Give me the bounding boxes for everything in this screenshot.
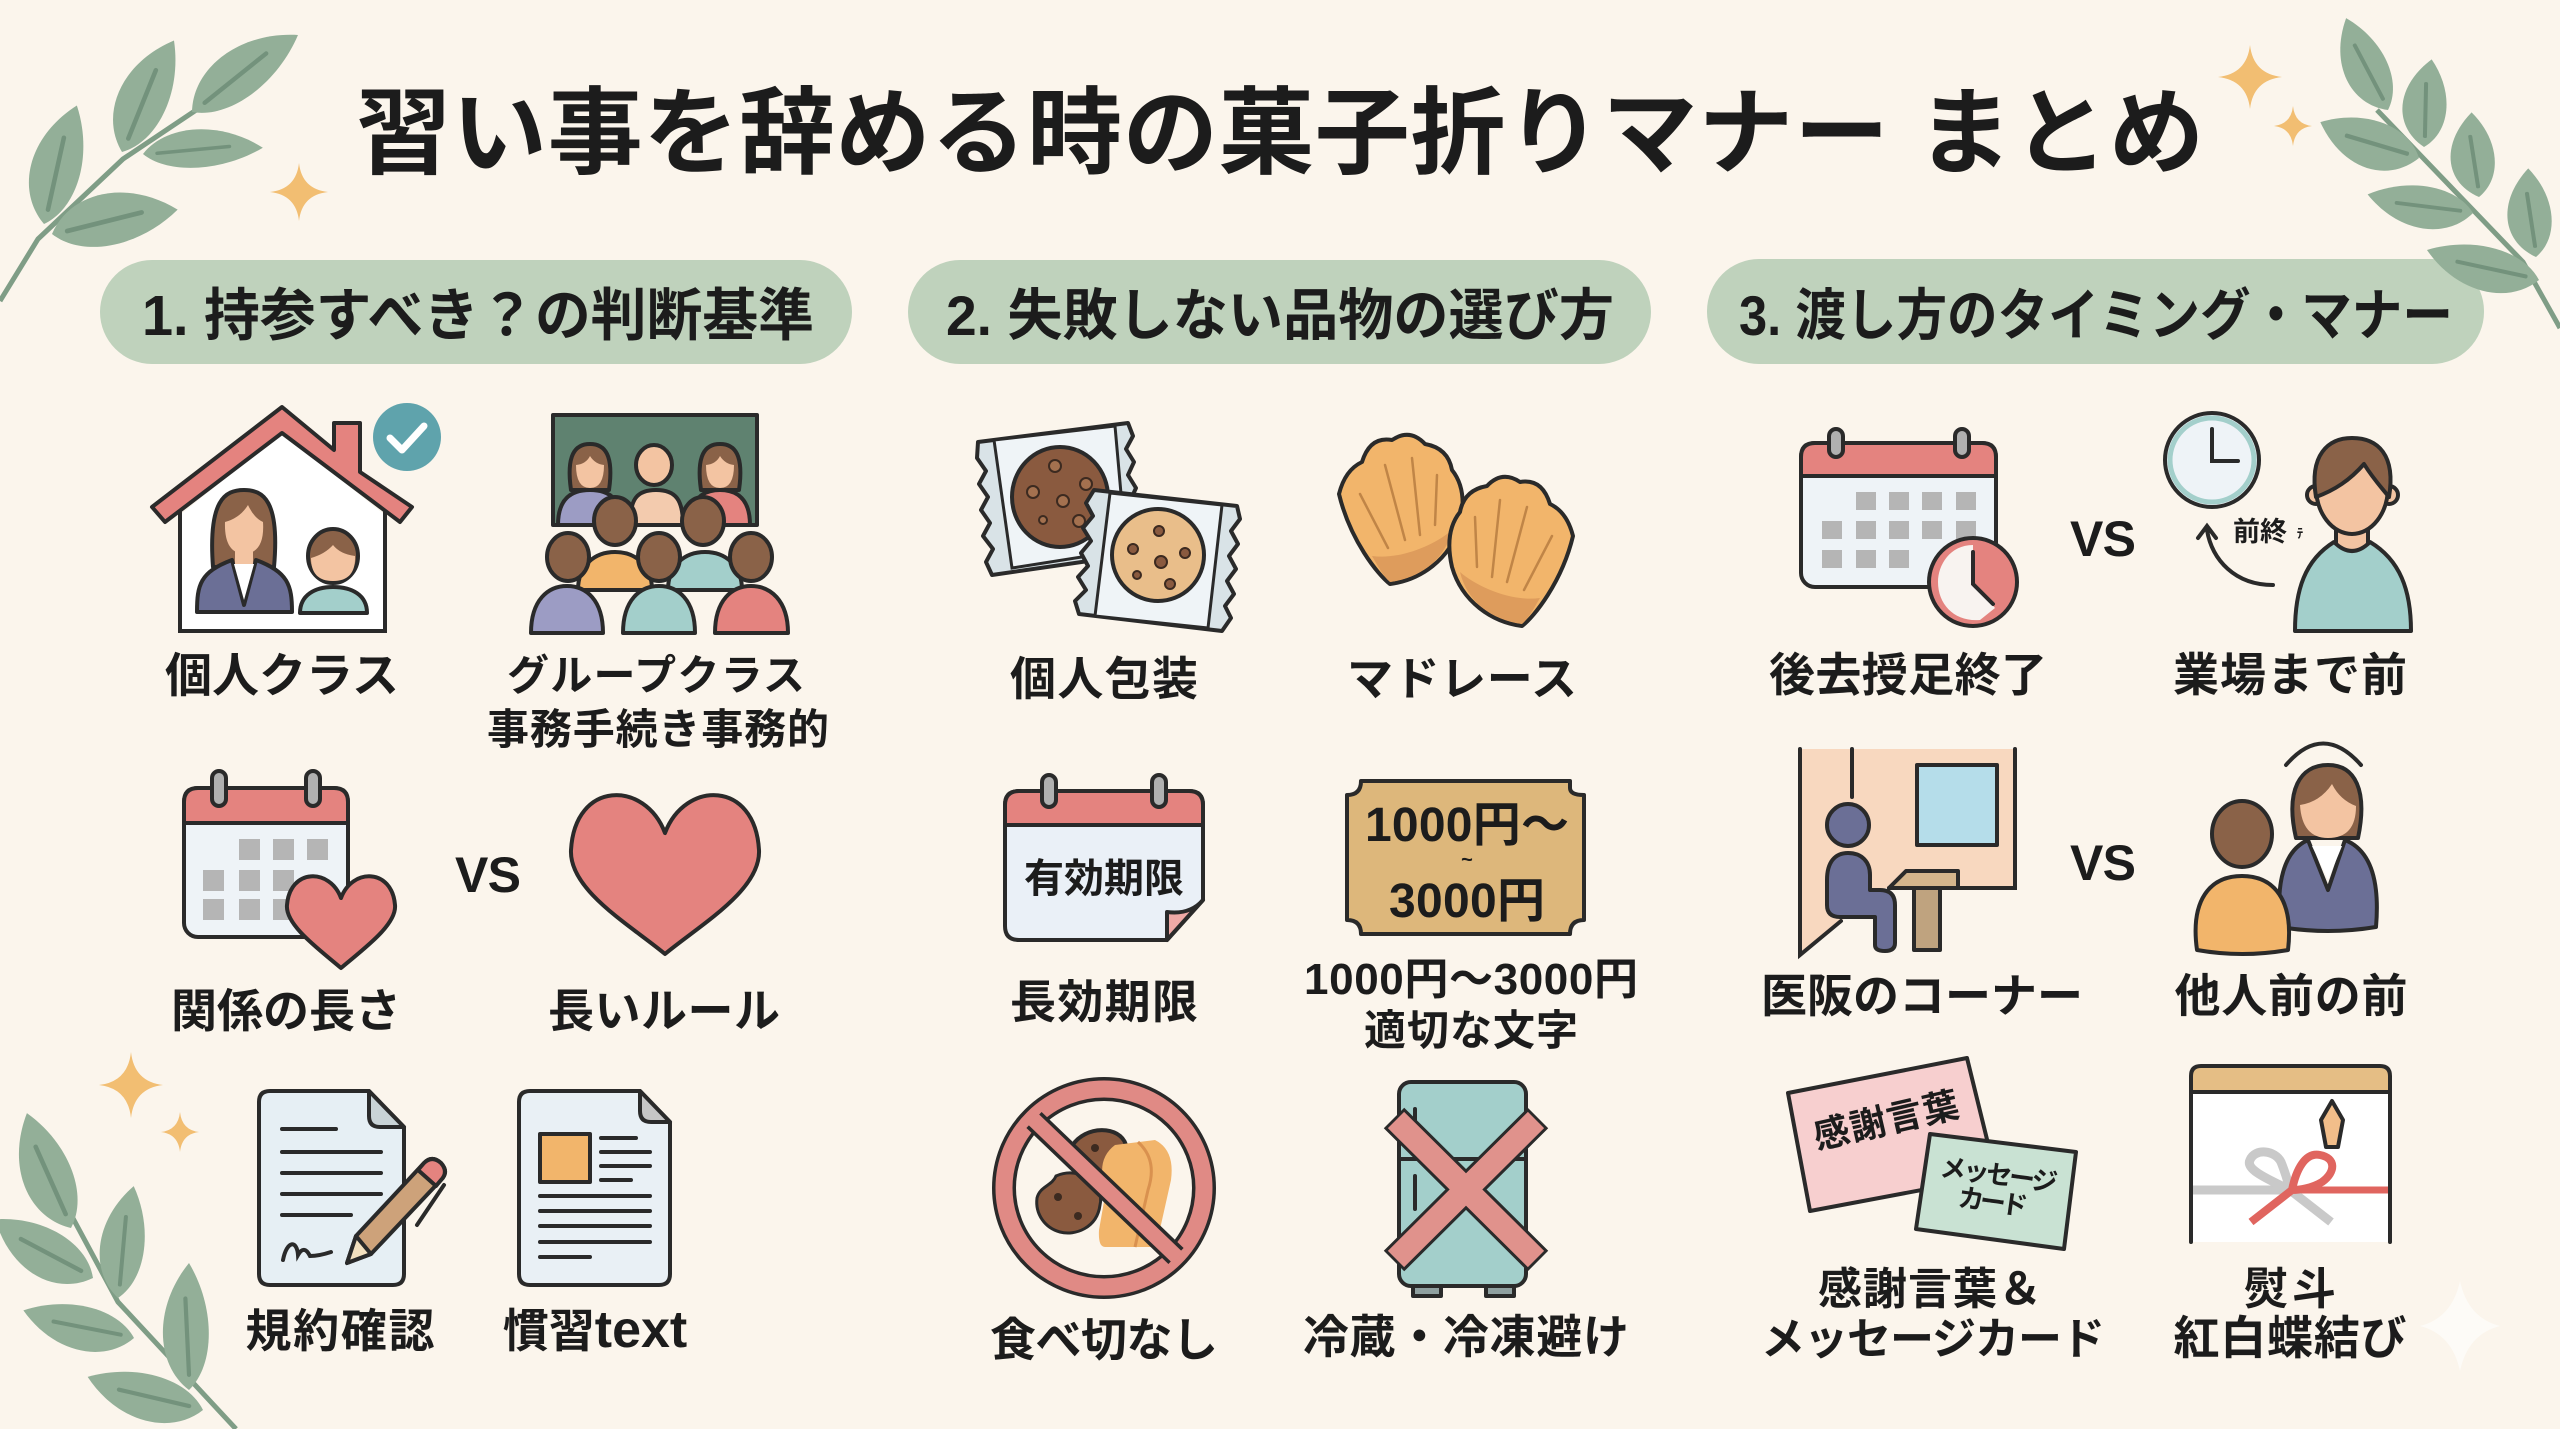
label: noshi, red and white bow: 紅白蝶結び bbox=[2174, 1312, 2406, 1364]
heading pill 1: 1. 持参すべき？の判断基準 bbox=[142, 284, 814, 348]
panel: column 3 handing timing and manners bbox=[1761, 413, 2411, 1364]
label: group class: 事務手続き事務的 bbox=[487, 706, 829, 753]
label: price range: 適切な文字 bbox=[1364, 1007, 1578, 1054]
label: long rule: 長いルール bbox=[548, 985, 780, 1037]
label: noshi, red and white bow bbox=[2174, 1265, 2406, 1364]
label: private class: 個人クラス bbox=[165, 649, 399, 702]
label: check the rules: 規約確認 bbox=[246, 1305, 434, 1357]
icon: price tag 1000-3000 yen bbox=[1347, 781, 1584, 934]
icon: fridge crossed out bbox=[1394, 1082, 1538, 1296]
icon: calendar with clock bbox=[1801, 429, 2017, 626]
icon: price tag 1000-3000 yen: 3000円 bbox=[1389, 875, 1545, 928]
label: avoid refrigerated and frozen: 冷蔵・冷凍避け bbox=[1303, 1311, 1629, 1363]
icon: document with pencil bbox=[259, 1091, 445, 1285]
label: long shelf life: 長効期限 bbox=[1010, 976, 1198, 1028]
label: after lesson ends: 後去授足終了 bbox=[1769, 649, 2047, 701]
label: price range: 1000円～3000円 bbox=[1304, 955, 1638, 1004]
icon: thank-you and message cards: 感謝言葉 bbox=[1809, 1084, 1963, 1157]
text: VS: VS bbox=[2070, 835, 2136, 891]
icon: thank-you and message cards: カード bbox=[1956, 1182, 2030, 1222]
label: words of thanks and message card: メッセージカード bbox=[1761, 1315, 2105, 1364]
heading pill 3: 3. 渡し方のタイミング・マナー bbox=[1739, 284, 2453, 347]
icon: clock and person with arrow: ﾃ bbox=[2297, 526, 2303, 541]
label: price range bbox=[1304, 955, 1638, 1054]
icon: price tag 1000-3000 yen: ~ bbox=[1461, 849, 1473, 871]
text: VS: VS bbox=[455, 847, 521, 903]
icon: thank-you and message cards: メッセージ bbox=[1938, 1152, 2059, 1198]
heading pill 2 bbox=[908, 260, 1651, 364]
icon: document with image bbox=[519, 1091, 670, 1285]
icon: price tag 1000-3000 yen: 1000円～ bbox=[1365, 799, 1569, 852]
icon: expiry date calendar: 有効期限 bbox=[1024, 857, 1184, 901]
icon: noshi with red and white bow bbox=[2191, 1066, 2390, 1242]
label: noshi, red and white bow: 熨斗 bbox=[2244, 1265, 2336, 1314]
icon: madeleines bbox=[1339, 435, 1573, 626]
icon: expiry date calendar bbox=[1005, 775, 1203, 940]
heading pill 2: 2. 失敗しない品物の選び方 bbox=[946, 284, 1614, 347]
panel: column 2 choosing gifts bbox=[977, 423, 1638, 1366]
icon: no perishable sweets bbox=[1004, 1089, 1204, 1287]
decoration: faint white sparkle bbox=[2420, 1281, 2500, 1371]
icon: clock and person with arrow: 前終 bbox=[2233, 517, 2287, 547]
title: 習い事を辞める時の菓子折りマナー まとめ bbox=[356, 81, 2204, 187]
icon: group class bbox=[531, 415, 788, 633]
icon: large heart bbox=[571, 795, 759, 954]
label: not single-serve: 食べ切なし bbox=[990, 1314, 1218, 1366]
label: individually wrapped: 個人包装 bbox=[1010, 653, 1198, 705]
label: corner space: 医阪のコーナー bbox=[1761, 970, 2083, 1022]
label: group class: グループクラス bbox=[507, 652, 805, 699]
icon: room corner with seated person bbox=[1800, 749, 2015, 955]
icon: individually wrapped cookies bbox=[977, 423, 1240, 631]
icon: in front of other people bbox=[2196, 744, 2377, 954]
label: before the venue: 業場まで前 bbox=[2173, 649, 2407, 701]
heading pill 1 bbox=[100, 260, 852, 364]
decoration: top-left branch bbox=[0, 13, 328, 301]
icon: calendar with heart bbox=[184, 771, 395, 968]
label: length of relationship: 関係の長さ bbox=[171, 985, 401, 1037]
decoration: top-right sparkles bbox=[2218, 45, 2312, 146]
heading pill 3 bbox=[1707, 259, 2484, 364]
text: VS: VS bbox=[2070, 511, 2136, 567]
icon: thank-you and message cards bbox=[1788, 1058, 2076, 1249]
label: custom text: 慣習text bbox=[503, 1301, 687, 1359]
label: words of thanks and message card: 感謝言葉＆ bbox=[1818, 1265, 2042, 1314]
label: in front of others: 他人前の前 bbox=[2174, 970, 2408, 1022]
decoration: bottom-left branch bbox=[0, 1052, 236, 1429]
icon: house with parent and child bbox=[152, 403, 441, 631]
label: words of thanks and message card bbox=[1761, 1265, 2105, 1364]
decoration: top-right branch bbox=[2311, 10, 2560, 328]
label: madeleine: マドレース bbox=[1347, 653, 1577, 705]
panel: column 1 judgement criteria bbox=[152, 403, 829, 1359]
icon: clock and person with arrow bbox=[2165, 413, 2411, 631]
label: group class bbox=[487, 652, 829, 753]
